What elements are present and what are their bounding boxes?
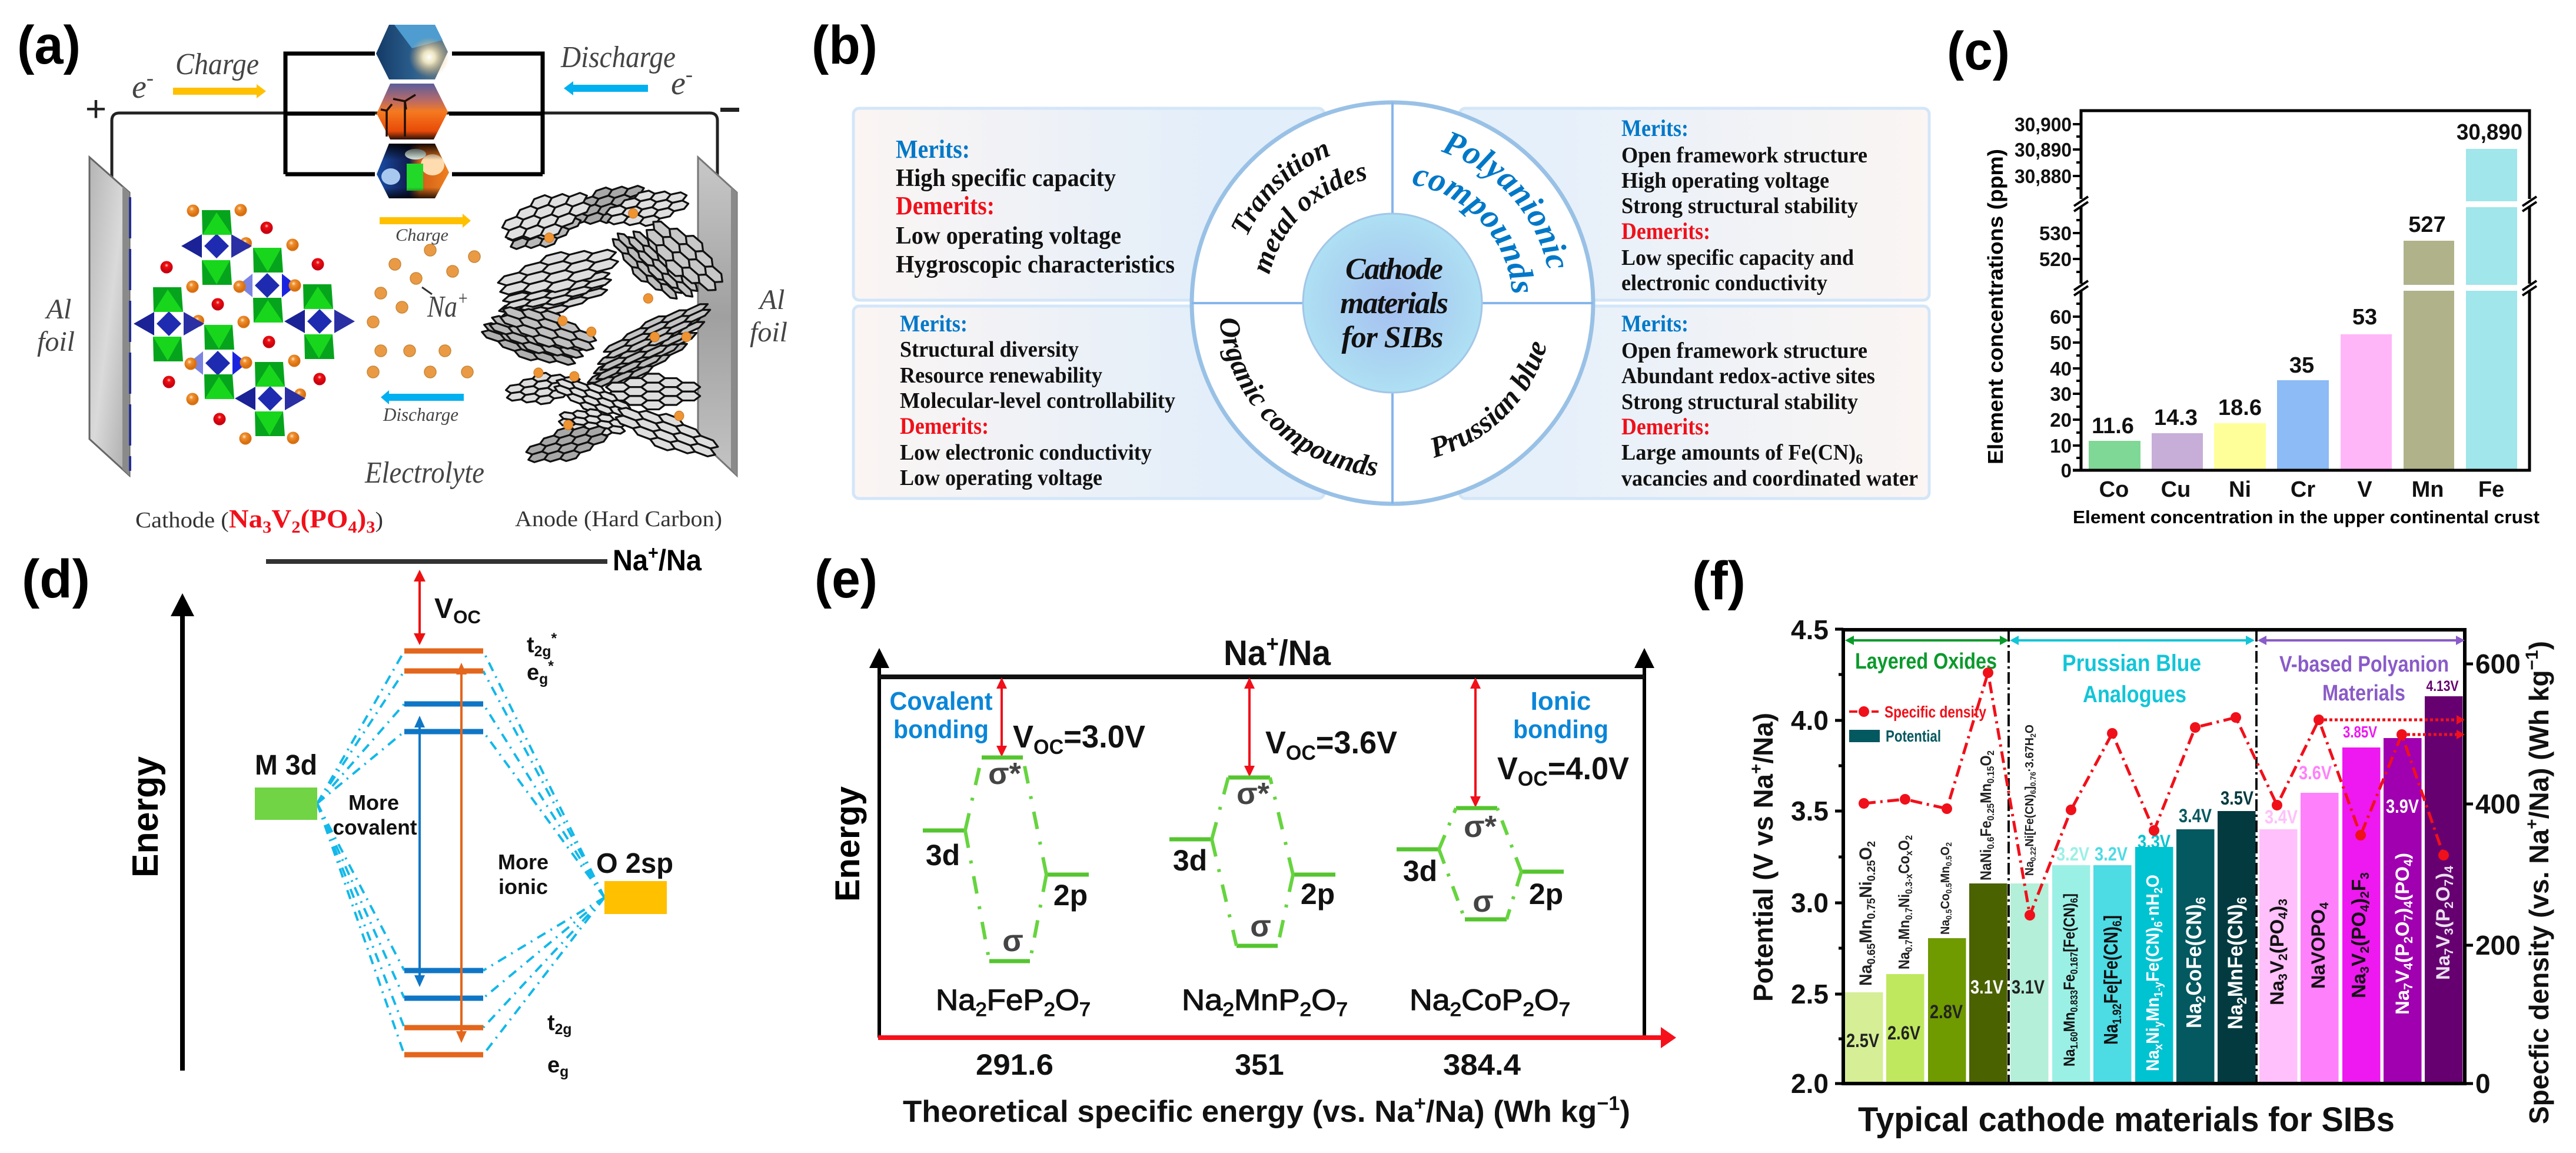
more ionic label bbox=[498, 850, 549, 899]
bar voltage labels: 2.8V bbox=[1930, 1001, 1963, 1022]
bar voltage labels: 3.2V bbox=[2095, 843, 2128, 865]
left tick labels: 4.5 bbox=[1791, 614, 1829, 645]
O 2sp block bbox=[596, 848, 673, 914]
box: polyanionic compounds: Open framework structure bbox=[1621, 143, 1867, 168]
compound names: Na2MnP 2O7 bbox=[1182, 983, 1348, 1020]
Na2MnP2O7 orbital diagram: σ bbox=[1250, 909, 1271, 943]
curved label transition metal oxides: Transition bbox=[1231, 144, 1330, 235]
box: polyanionic compounds: Low specific capacity and bbox=[1621, 245, 1854, 270]
label d: (d) bbox=[22, 549, 90, 609]
y tick labels: 30,890 bbox=[2015, 139, 2072, 161]
box: polyanionic compounds: Merits: bbox=[1621, 115, 1688, 141]
right tick labels: 600 bbox=[2475, 649, 2521, 679]
more ionic label: More bbox=[498, 850, 549, 874]
energy arrow bbox=[171, 593, 194, 1071]
x tick labels: V bbox=[2357, 477, 2372, 502]
left tick labels: 3.5 bbox=[1791, 796, 1829, 826]
rotated material labels: Na3V2(PO4)3 bbox=[2266, 899, 2290, 1005]
Voc label: VOC bbox=[434, 593, 481, 627]
electrolyte label: Electrolyte bbox=[364, 456, 484, 490]
Na2CoP2O7 orbital diagram bbox=[1397, 808, 1564, 919]
box: polyanionic compounds: High operating voltage bbox=[1621, 168, 1829, 193]
y tick labels: 30,880 bbox=[2015, 165, 2072, 187]
covalent bonding label: Covalent bbox=[890, 687, 993, 716]
rotated material labels bbox=[1856, 725, 2456, 1071]
x tick labels: Cr bbox=[2291, 477, 2315, 502]
blue transition arrow bbox=[414, 716, 425, 987]
right Al foil bbox=[698, 157, 737, 476]
x axis title: Theoretical specific energy (vs. Na +/Na) (Wh kg−1) bbox=[903, 1092, 1630, 1129]
layered oxides range: Layered Oxides bbox=[1855, 649, 1997, 674]
bar voltage labels bbox=[1846, 678, 2459, 1051]
ionic bonding label: bonding bbox=[1513, 715, 1608, 744]
axis ticks bbox=[2073, 124, 2081, 458]
box: organic compounds: Demerits: bbox=[900, 413, 989, 439]
power source loop bbox=[285, 54, 543, 174]
x tick labels: Ni bbox=[2229, 477, 2251, 502]
label a: (a) bbox=[17, 15, 81, 75]
box: transition metal oxides: Merits: bbox=[896, 135, 970, 164]
box: transition metal oxides: Hygroscopic characteristics bbox=[896, 251, 1175, 278]
rotated material labels: Na3V2(PO4)2F3 bbox=[2348, 872, 2372, 998]
rotated material labels: Na1.60Mn0.833Fe0.167[Fe(CN)6] bbox=[2060, 893, 2080, 1066]
value labels: 35 bbox=[2289, 353, 2314, 378]
Na2FeP2O7 orbital diagram: σ bbox=[1002, 924, 1023, 958]
electron right: e- bbox=[671, 62, 693, 102]
right tick labels bbox=[2475, 649, 2521, 1099]
Na+/Na top label: Na+/Na bbox=[1224, 632, 1331, 673]
minus sign bbox=[720, 108, 739, 112]
Voc values bbox=[1013, 719, 1629, 790]
panel f: potential and specific density chart bbox=[1692, 551, 2554, 1139]
rotated material labels: Na7V3(P2O7)4 bbox=[2432, 866, 2456, 980]
box: polyanionic compounds: Strong structural stability bbox=[1621, 194, 1858, 218]
discharge arrow bbox=[564, 81, 648, 95]
box: prussian blue: vacancies and coordinated water bbox=[1621, 466, 1918, 491]
plot frame bbox=[1843, 630, 2465, 1084]
rotated material labels: Na7V4(P2O7)4(PO4) bbox=[2392, 853, 2415, 1015]
bar voltage labels: 3.4V bbox=[2179, 805, 2212, 826]
x tick labels: Fe bbox=[2478, 477, 2504, 502]
left Al foil text bbox=[37, 294, 75, 357]
frame bbox=[869, 648, 1654, 1038]
bonding dash lines bbox=[317, 651, 604, 1055]
small discharge text: Discharge bbox=[383, 404, 458, 425]
left axis title: Potential (V vs Na+/Na) bbox=[1747, 713, 1779, 1002]
hard carbon anode bbox=[478, 176, 732, 471]
specific energy values: 351 bbox=[1235, 1048, 1284, 1081]
Na2FeP2O7 orbital diagram: 3d bbox=[926, 839, 960, 872]
compound names bbox=[936, 983, 1570, 1020]
Na2FeP2O7 orbital diagram bbox=[923, 757, 1089, 961]
bar voltage labels: 3.1V bbox=[2012, 976, 2045, 998]
value labels: 14.3 bbox=[2154, 406, 2198, 430]
bar voltage labels: 3.6V bbox=[2299, 762, 2332, 783]
potential bars bbox=[1845, 696, 2462, 1084]
red x axis arrow bbox=[878, 1027, 1676, 1048]
bar voltage labels: 3.5V bbox=[2221, 788, 2254, 809]
rotated material labels: Na1.92Fe[Fe(CN)6] bbox=[2100, 915, 2124, 1045]
value labels: 11.6 bbox=[2092, 414, 2134, 438]
plus sign: + bbox=[85, 89, 107, 129]
more covalent label: More bbox=[348, 790, 399, 815]
box: organic compounds: Structural diversity bbox=[900, 337, 1079, 362]
prussian blue range: Analogues bbox=[2083, 682, 2186, 707]
cathode crystal structure bbox=[134, 204, 355, 445]
Na2CoP2O7 orbital diagram: σ bbox=[1473, 885, 1494, 919]
right Al foil text: Al bbox=[758, 284, 785, 315]
energy label: Energy bbox=[125, 756, 166, 878]
y tick labels bbox=[2015, 114, 2072, 481]
Na2FeP2O7 orbital diagram: σ* bbox=[988, 757, 1022, 791]
x axis title: Element concentration in the upper continental crust bbox=[2073, 507, 2540, 527]
specific density line bbox=[1859, 667, 2465, 921]
central wheel bbox=[1192, 102, 1593, 504]
specific energy values: 291.6 bbox=[976, 1048, 1053, 1081]
anode caption: Anode (Hard Carbon) bbox=[515, 507, 722, 531]
curved label prussian blue: Prussian blue bbox=[1431, 341, 1545, 458]
legend bbox=[1849, 703, 1986, 745]
value labels: 30,890 bbox=[2457, 120, 2522, 145]
more covalent label bbox=[333, 790, 417, 839]
prussian blue range bbox=[2010, 636, 2255, 707]
x tick labels: Co bbox=[2099, 477, 2129, 502]
left Al foil text: Al bbox=[45, 294, 71, 325]
axes frame bbox=[2073, 111, 2530, 470]
panel c: element concentration bar chart bbox=[1947, 21, 2540, 527]
left tick labels: 2.0 bbox=[1791, 1068, 1829, 1099]
value labels bbox=[2092, 120, 2522, 438]
centre title bbox=[1340, 252, 1448, 354]
bar voltage labels: 4.13V bbox=[2426, 678, 2459, 695]
x axis title: Typical cathode materials for SIBs bbox=[1858, 1101, 2395, 1139]
red Voc arrow bbox=[414, 570, 426, 645]
orbital labels: eg bbox=[547, 1053, 569, 1080]
right tick labels: 0 bbox=[2475, 1068, 2491, 1099]
curved label organic compounds: Organic compounds bbox=[1220, 318, 1378, 476]
layered oxides range bbox=[1845, 636, 2009, 674]
left tick labels: 3.0 bbox=[1791, 888, 1829, 918]
right tick labels: 200 bbox=[2475, 930, 2521, 961]
compound names: Na2CoP2O7 bbox=[1410, 983, 1570, 1020]
left tick labels bbox=[1791, 614, 1829, 1099]
right tick labels: 400 bbox=[2475, 789, 2521, 819]
box: prussian blue: Demerits: bbox=[1621, 413, 1710, 440]
rotated material labels: Na2MnFe(CN)6 bbox=[2224, 897, 2249, 1029]
Voc values: VOC=3.6V bbox=[1265, 725, 1397, 765]
group dividers bbox=[2009, 630, 2256, 1084]
energy label: Energy bbox=[829, 786, 867, 902]
renewable hexagon icons bbox=[376, 25, 449, 198]
centre title: materials bbox=[1340, 287, 1448, 320]
polyanion range: Materials bbox=[2322, 681, 2405, 706]
rotated material labels: NaxNiyMn1-yFe(CN)6·nH2O bbox=[2142, 875, 2165, 1071]
y tick labels: 30,900 bbox=[2015, 114, 2072, 135]
bars bbox=[2089, 149, 2520, 470]
panel b: cathode material classes bbox=[812, 15, 1930, 506]
Na2MnP2O7 orbital diagram: 3d bbox=[1173, 844, 1207, 877]
left tick labels: 4.0 bbox=[1791, 705, 1829, 736]
rotated material labels: Na0.22Ni[Fe(CN)6]0.76·3.67H2O bbox=[2023, 725, 2037, 876]
ionic bonding label: Ionic bbox=[1531, 687, 1591, 716]
sodium ions in electrolyte bbox=[367, 244, 480, 378]
y tick labels: 530 bbox=[2039, 222, 2072, 244]
rotated material labels: NaNi0.6Fe0.25Mn0.15O2 bbox=[1977, 750, 1996, 880]
y tick labels: 520 bbox=[2039, 248, 2072, 270]
discharge label: Discharge bbox=[560, 41, 676, 74]
Na2CoP2O7 orbital diagram: 3d bbox=[1403, 855, 1437, 888]
bar voltage labels: 3.9V bbox=[2386, 796, 2419, 817]
ionic bonding label bbox=[1513, 687, 1608, 744]
orbital labels: eg* bbox=[527, 659, 554, 687]
y tick labels: 30 bbox=[2050, 383, 2072, 405]
box: polyanionic compounds: Demerits: bbox=[1621, 218, 1710, 244]
Voc values: VOC=4.0V bbox=[1497, 751, 1629, 790]
energy levels bbox=[404, 651, 483, 1055]
bar voltage labels: 3.4V bbox=[2265, 806, 2298, 828]
curved label transition metal oxides: metal oxides bbox=[1257, 167, 1367, 274]
Na2MnP2O7 orbital diagram: σ* bbox=[1237, 777, 1270, 811]
small charge text: Charge bbox=[395, 225, 448, 245]
right Al foil text: foil bbox=[750, 317, 787, 348]
y tick labels: 20 bbox=[2050, 409, 2072, 431]
compound names: Na2FeP2O7 bbox=[936, 983, 1091, 1020]
box: prussian blue: Open framework structure bbox=[1621, 338, 1867, 363]
electron left: e- bbox=[132, 66, 154, 105]
x tick labels bbox=[2099, 477, 2504, 502]
orbital labels: t2g* bbox=[527, 631, 557, 660]
y tick labels: 0 bbox=[2061, 460, 2072, 481]
box: polyanionic compounds: electronic conductivity bbox=[1621, 271, 1827, 295]
Na2FeP2O7 orbital diagram: 2p bbox=[1053, 879, 1088, 912]
rotated material labels: NaVOPO4 bbox=[2308, 902, 2331, 989]
axis ticks bbox=[1835, 629, 2473, 1084]
legend: Specific density bbox=[1884, 703, 1986, 721]
Na2MnP2O7 orbital diagram bbox=[1169, 777, 1335, 946]
curved label polyanionic compounds: Polyanionic bbox=[1441, 132, 1567, 268]
centre title: for SIBs bbox=[1342, 321, 1443, 354]
value labels: 18.6 bbox=[2218, 396, 2262, 420]
M 3d block bbox=[255, 750, 317, 820]
box: organic compounds: Low operating voltage bbox=[900, 466, 1102, 490]
covalent bonding label bbox=[890, 687, 993, 744]
Na+/Na reference line bbox=[266, 559, 607, 564]
specific energy values: 384.4 bbox=[1443, 1048, 1521, 1081]
rotated material labels: Na0.65Mn0.75Ni0.25O2 bbox=[1856, 841, 1878, 986]
orbital labels bbox=[527, 631, 571, 1080]
bar voltage labels: 2.6V bbox=[1887, 1022, 1921, 1044]
orange transition arrow bbox=[456, 663, 467, 1043]
external circuit wires bbox=[112, 113, 717, 177]
label b: (b) bbox=[812, 15, 877, 75]
prussian blue range: Prussian Blue bbox=[2062, 650, 2201, 676]
panel a: sodium-ion battery schematic bbox=[17, 15, 787, 537]
box: organic compounds: Low electronic conductivity bbox=[900, 440, 1152, 465]
box: organic compounds: Resource renewability bbox=[900, 363, 1102, 388]
box: transition metal oxides: Demerits: bbox=[896, 191, 995, 220]
small charge arrow bbox=[380, 214, 471, 228]
value labels: 53 bbox=[2352, 305, 2377, 330]
y tick labels: 50 bbox=[2050, 332, 2072, 354]
y tick labels: 60 bbox=[2050, 306, 2072, 328]
rotated material labels: Na2CoFe(CN)6 bbox=[2182, 897, 2208, 1028]
label c: (c) bbox=[1947, 21, 2010, 81]
box: organic compounds bbox=[853, 306, 1324, 499]
legend: Potential bbox=[1886, 727, 1941, 745]
rotated material labels: Na0.7Mn0.7Ni0.3-xCoxO2 bbox=[1895, 835, 1914, 969]
x tick labels: Cu bbox=[2161, 477, 2191, 502]
rotated material labels: Na0.5Co0.5Mn0.5O2 bbox=[1939, 842, 1953, 935]
x tick labels: Mn bbox=[2412, 477, 2444, 502]
charge label: Charge bbox=[175, 48, 259, 81]
orbital labels: t2g bbox=[547, 1011, 571, 1038]
left Al foil text: foil bbox=[37, 326, 75, 357]
y tick labels: 40 bbox=[2050, 358, 2072, 380]
box: transition metal oxides bbox=[853, 108, 1324, 300]
curved label polyanionic compounds: compounds bbox=[1412, 171, 1534, 293]
right axis title: Specfic density (vs. Na+/Na) (Wh kg−1) bbox=[2522, 641, 2554, 1124]
y axis title: Element concentrations (ppm) bbox=[1983, 149, 2007, 464]
bar voltage labels: 3.3V bbox=[2138, 831, 2171, 852]
specific energy values bbox=[976, 1048, 1521, 1081]
box: prussian blue: Abundant redox-active sites bbox=[1621, 364, 1875, 388]
y tick labels: 10 bbox=[2050, 435, 2072, 457]
red voltage arrows bbox=[996, 677, 1481, 808]
box: polyanionic compounds bbox=[1460, 108, 1929, 300]
polyanion range: V-based Polyanion bbox=[2279, 652, 2449, 677]
Na2MnP2O7 orbital diagram: 2p bbox=[1301, 878, 1335, 911]
box: transition metal oxides: Low operating voltage bbox=[896, 222, 1121, 250]
covalent bonding label: bonding bbox=[893, 715, 989, 744]
polyanion range bbox=[2258, 636, 2465, 706]
right Al foil text bbox=[750, 284, 787, 348]
bar voltage labels: 3.85V bbox=[2343, 723, 2377, 741]
panel e: pyrophosphate orbital diagrams bbox=[815, 549, 1676, 1129]
axis break marks bbox=[2074, 197, 2537, 295]
Na2CoP2O7 orbital diagram: σ* bbox=[1464, 810, 1497, 844]
box: prussian blue: Strong structural stability bbox=[1621, 390, 1858, 414]
cathode caption: Cathode (Na3V2(PO4)3) bbox=[135, 504, 383, 537]
Na+ label: Na+ bbox=[427, 288, 468, 324]
left Al foil bbox=[89, 157, 130, 476]
O 2sp block: O 2sp bbox=[596, 848, 673, 879]
charge arrow bbox=[173, 84, 266, 98]
box: prussian blue bbox=[1460, 306, 1929, 499]
small discharge arrow bbox=[381, 390, 464, 404]
box: prussian blue: Merits: bbox=[1621, 310, 1688, 337]
box: organic compounds: Merits: bbox=[900, 310, 968, 337]
centre title: Cathode bbox=[1345, 252, 1443, 286]
panel d: molecular orbital energy diagram bbox=[22, 541, 702, 1080]
bar voltage labels: 3.2V bbox=[2056, 843, 2090, 865]
more covalent label: covalent bbox=[333, 815, 417, 839]
value labels: 527 bbox=[2408, 212, 2446, 237]
label e: (e) bbox=[815, 549, 877, 609]
box: organic compounds: Molecular-level controllability bbox=[900, 388, 1175, 413]
bar voltage labels: 2.5V bbox=[1846, 1030, 1880, 1051]
left tick labels: 2.5 bbox=[1791, 979, 1829, 1009]
box: prussian blue: Large amounts of Fe(CN)6 bbox=[1621, 440, 1863, 467]
box: transition metal oxides: High specific capacity bbox=[896, 165, 1116, 192]
M 3d block: M 3d bbox=[255, 750, 317, 781]
Na2CoP2O7 orbital diagram: 2p bbox=[1529, 878, 1563, 911]
bar voltage labels: 3.1V bbox=[1970, 976, 2004, 998]
label f: (f) bbox=[1692, 551, 1746, 611]
Na+/Na text: Na+/Na bbox=[613, 541, 702, 577]
more ionic label: ionic bbox=[498, 875, 548, 899]
Voc values: VOC=3.0V bbox=[1013, 719, 1145, 759]
